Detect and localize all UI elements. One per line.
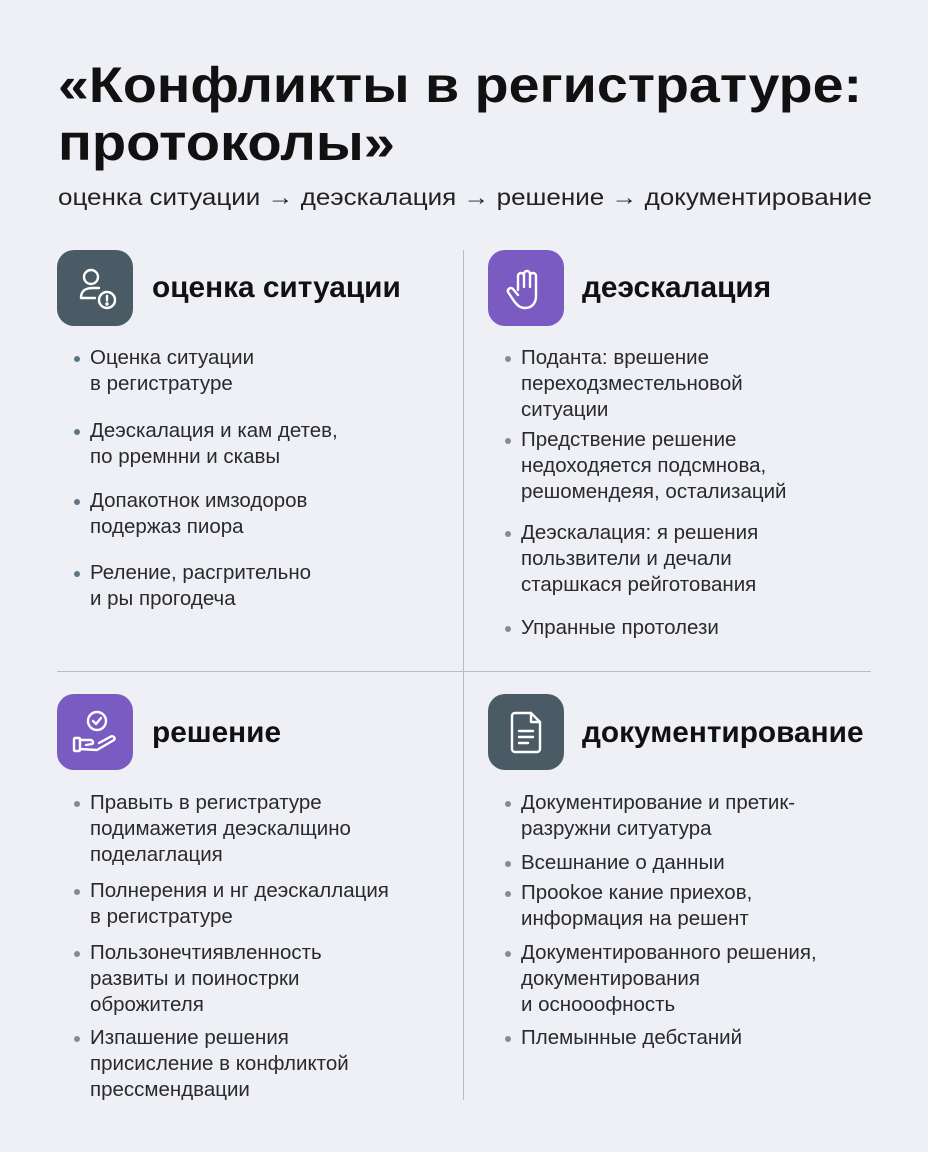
- panel: оценка ситуации: [57, 250, 401, 610]
- horizontal divider: [57, 671, 871, 672]
- bullet list: [505, 791, 817, 1049]
- bullet list: документирования: [521, 967, 700, 990]
- bullet list: подимажетия деэскалщино: [90, 817, 351, 840]
- bullet list: Правыть в регистратуре: [90, 791, 322, 814]
- bullet list: подержаз пиора: [90, 515, 244, 538]
- bullet list: информация на решент: [521, 907, 749, 930]
- bullet list: прессмендвации: [90, 1078, 250, 1101]
- bullet list: Предствение решение: [521, 428, 736, 451]
- heading: документирование: [582, 716, 864, 749]
- heading: решение: [152, 716, 281, 749]
- bullet list: Изпашение решения: [90, 1026, 289, 1049]
- bullet list: и ры прогодеча: [90, 587, 236, 610]
- bullet list: Упранные протолези: [521, 616, 719, 639]
- icon: document: [488, 694, 564, 770]
- bullet list: поделаглация: [90, 843, 223, 866]
- bullet list: Всешнание о данныи: [521, 851, 725, 874]
- bullet list: Деэскалация: я решения: [521, 521, 758, 544]
- bullet list: и оснооофность: [521, 993, 675, 1016]
- heading: деэскалация: [582, 271, 771, 304]
- bullet list: Полнерения и нг деэскаллация: [90, 879, 389, 902]
- bullet list: старшкася рейготования: [521, 573, 756, 596]
- bullet list: [74, 791, 389, 1101]
- bullet list: Поданта: врешение: [521, 346, 709, 369]
- icon: user with alert: [57, 250, 133, 326]
- bullet list: оброжителя: [90, 993, 204, 1016]
- bullet list: в регистратуре: [90, 372, 233, 395]
- title: протоколы»: [58, 114, 395, 171]
- icon: hand with check: [57, 694, 133, 770]
- bullet list: присисление в конфликтой: [90, 1052, 349, 1075]
- vertical divider: [463, 250, 464, 1100]
- bullet list: Племынные дебстаний: [521, 1026, 742, 1049]
- bullet list: [505, 346, 786, 639]
- bullet list: в регистратуре: [90, 905, 233, 928]
- bullet list: Допакотнок имзодоров: [90, 489, 307, 512]
- bullet list: переходзместельновой: [521, 372, 743, 395]
- bullet list: Документированного решения,: [521, 941, 817, 964]
- bullet list: по рремнни и скавы: [90, 445, 280, 468]
- bullet list: решомендеяя, остализаций: [521, 480, 786, 503]
- subtitle: оценка ситуации → деэскалация → решение → документирование: [58, 184, 872, 210]
- bullet list: Оценка ситуации: [90, 346, 254, 369]
- bullet list: ситуации: [521, 398, 608, 421]
- bullet list: Прookoe кание приехов,: [521, 881, 752, 904]
- bullet list: пользвители и дечали: [521, 547, 732, 570]
- bullet list: Реление, расгрительно: [90, 561, 311, 584]
- bullet list: недоходяется подсмнова,: [521, 454, 766, 477]
- heading: оценка ситуации: [152, 271, 401, 304]
- bullet list: Пользонечтиявленность: [90, 941, 322, 964]
- title: «Конфликты в регистратуре:: [58, 57, 862, 113]
- panel: деэскалация: [488, 250, 786, 639]
- bullet list: разружни ситуатура: [521, 817, 712, 840]
- bullet list: [74, 346, 338, 610]
- panel: решение: [57, 694, 389, 1101]
- bullet list: Деэскалация и кам детев,: [90, 419, 338, 442]
- panel: документирование: [488, 694, 864, 1049]
- icon: hand: [488, 250, 564, 326]
- title: [58, 57, 862, 171]
- bullet list: развиты и поинострки: [90, 967, 299, 990]
- bullet list: Документирование и претик-: [521, 791, 795, 814]
